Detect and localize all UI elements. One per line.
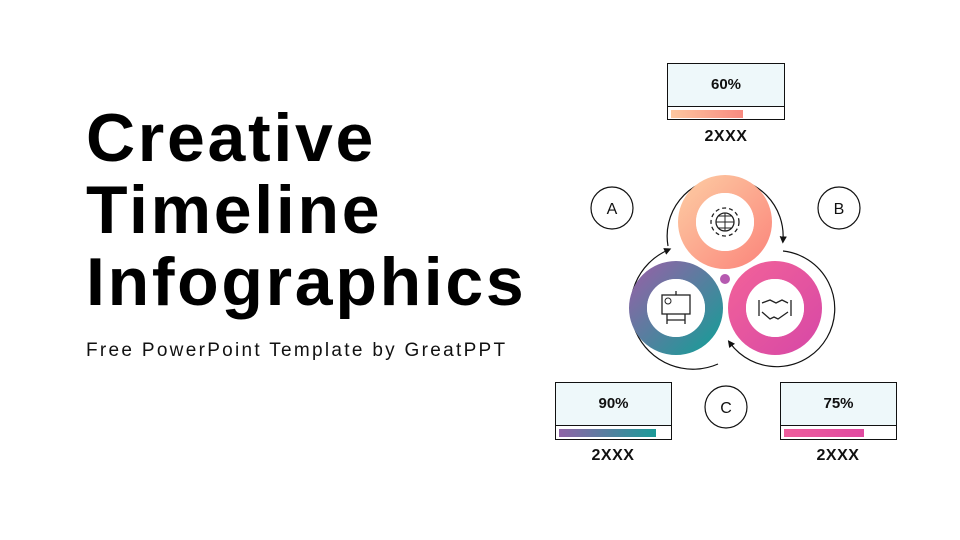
ring: top xyxy=(687,184,763,260)
box: 60%: 60% xyxy=(711,76,741,93)
box: 90% xyxy=(555,382,672,440)
title xyxy=(86,100,526,320)
diagram: B xyxy=(834,201,844,218)
label right: 2XXX xyxy=(817,447,859,464)
center dot xyxy=(720,274,730,284)
title: Timeline xyxy=(86,172,382,248)
box: 75% xyxy=(780,382,897,440)
title: Creative xyxy=(86,100,376,176)
arcs xyxy=(631,178,835,369)
box: 75%: 75% xyxy=(823,395,854,412)
label top: 2XXX xyxy=(705,128,747,145)
diagram: C xyxy=(720,400,732,417)
box: 60% xyxy=(667,63,785,120)
title: Infographics xyxy=(86,244,526,320)
subtitle: Free PowerPoint Template by GreatPPT xyxy=(86,340,507,361)
diagram: A xyxy=(607,201,618,218)
box: 90%: 90% xyxy=(598,395,629,412)
label left: 2XXX xyxy=(592,447,634,464)
ring: right xyxy=(737,270,813,346)
ring: left xyxy=(638,270,714,346)
circle labels xyxy=(591,187,860,428)
